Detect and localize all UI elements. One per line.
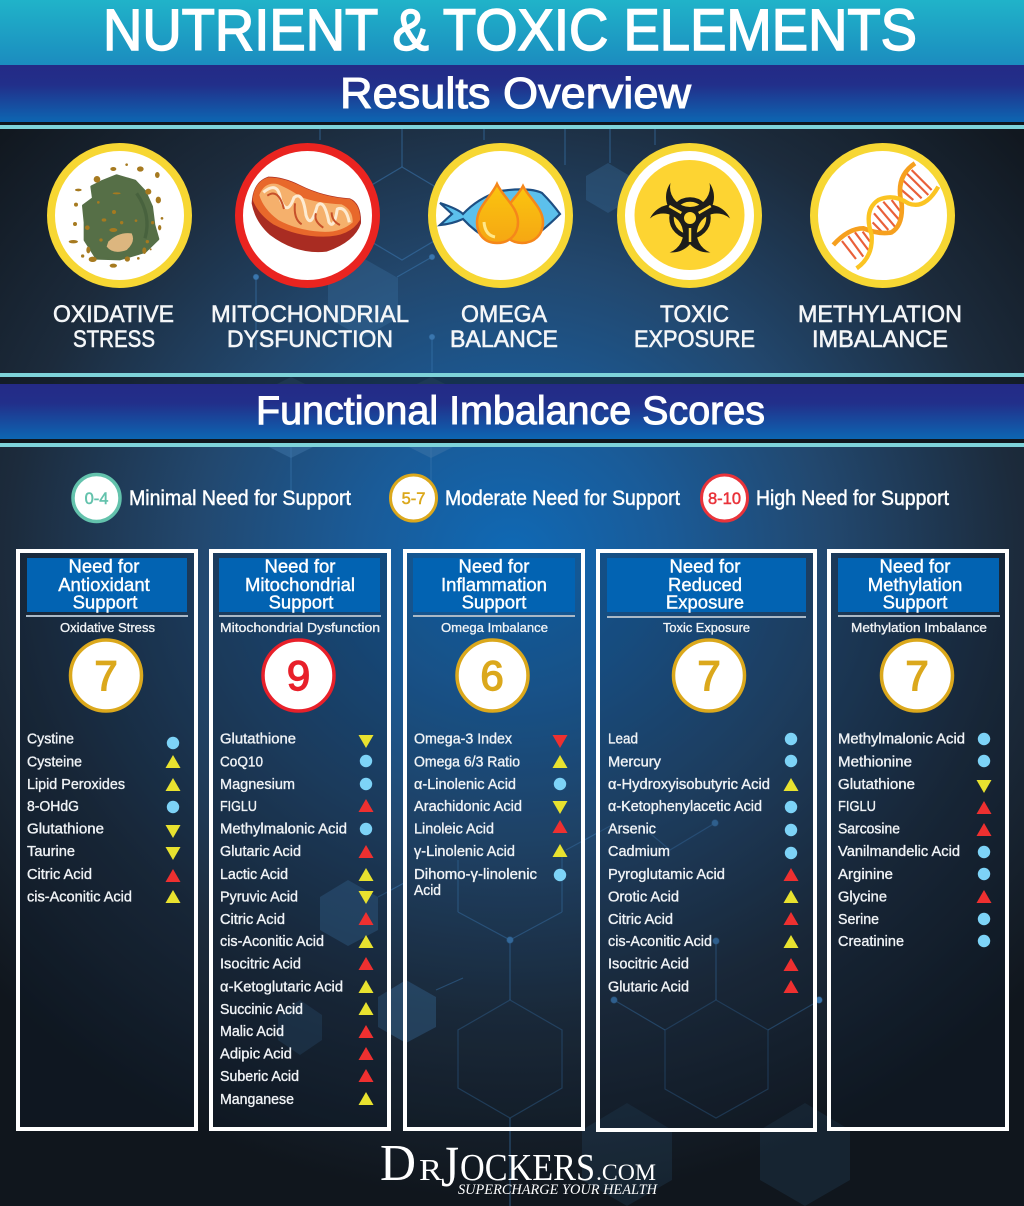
panel header: Need for [69, 556, 139, 576]
marker list: Sarcosine [838, 822, 900, 838]
marker list: cis-Aconitic Acid [27, 890, 132, 906]
panel header: Exposure [666, 592, 744, 612]
marker list: Glutathione [220, 732, 296, 748]
marker list: 8-OHdG [27, 799, 79, 815]
panel header: Need for [880, 556, 950, 576]
marker list: Dihomo-γ-linolenic [414, 867, 537, 883]
panel header: Oxidative Stress [60, 621, 155, 635]
icon labels: DYSFUNCTION [227, 326, 393, 353]
marker list: Citric Acid [220, 912, 285, 928]
icon labels: TOXIC [660, 301, 729, 328]
panel header [26, 556, 188, 635]
marker list: α-Hydroxyisobutyric Acid [608, 777, 770, 793]
marker list [608, 732, 798, 996]
panel header: Mitochondrial Dysfunction [220, 621, 380, 635]
icon: biohazard [621, 147, 758, 284]
logo: DrJockers.com [380, 1134, 658, 1199]
title band [0, 0, 1024, 65]
marker list: Arachidonic Acid [414, 799, 522, 815]
panel header: Mitochondrial [245, 574, 355, 595]
marker list: Arginine [838, 867, 893, 883]
marker list: Lipid Peroxides [27, 777, 125, 793]
section band: functional imbalance scores [0, 373, 1024, 447]
panel header: Reduced [668, 574, 742, 595]
marker list: Mercury [608, 754, 662, 770]
logo: DrJockers.com: .COM [596, 1160, 656, 1185]
icon labels: OMEGA [461, 301, 548, 328]
panel: methylation support [829, 551, 1007, 1129]
icon labels: MITOCHONDRIAL [211, 301, 409, 328]
marker list: Omega 6/3 Ratio [414, 754, 520, 770]
panel header: Inflammation [441, 574, 547, 595]
panel header: Support [462, 592, 526, 612]
score: 7 [70, 640, 142, 711]
marker list: Malic Acid [220, 1024, 284, 1040]
marker list: α-Ketophenylacetic Acid [608, 799, 762, 815]
score: 9: 9 [287, 652, 310, 699]
marker list: Lead [608, 732, 638, 748]
panel header [838, 556, 1000, 635]
panel: inflammation support [405, 551, 583, 1129]
panel header [413, 556, 575, 635]
score: 9 [263, 640, 334, 711]
icon: DNA helix [814, 147, 951, 284]
subtitle band: results overview [0, 65, 1024, 129]
panel header: Support [73, 592, 137, 612]
marker list: Adipic Acid [220, 1046, 292, 1062]
marker list: Methylmalonic Acid [838, 732, 965, 748]
hexagon network background [251, 129, 850, 1206]
panel: mitochondrial support [211, 551, 389, 1129]
marker list: Isocitric Acid [220, 956, 301, 972]
panel header: Need for [670, 556, 740, 576]
icon labels [53, 301, 962, 353]
marker list [27, 732, 180, 906]
logo: DrJockers.com: D [380, 1135, 416, 1192]
marker list: Methylmalonic Acid [220, 822, 347, 838]
logo: DrJockers.com: SUPERCHARGE YOUR HEALTH [458, 1182, 658, 1198]
icon labels: EXPOSURE [634, 326, 755, 353]
score: 7 [674, 640, 744, 711]
legend [73, 474, 949, 522]
marker list: Cadmium [608, 844, 670, 860]
icon: fish and oil drops [432, 147, 569, 284]
marker list: Glutathione [27, 822, 104, 838]
legend: 0-4 [85, 490, 108, 508]
marker list: FIGLU [838, 799, 876, 815]
panel header: Antioxidant [58, 574, 150, 595]
icon labels: STRESS [73, 326, 155, 353]
marker list: Manganese [220, 1092, 294, 1108]
legend: Minimal Need for Support [129, 487, 351, 510]
panel header: Need for [459, 556, 529, 576]
icon labels: METHYLATION [798, 301, 962, 328]
panel header [219, 556, 381, 635]
marker list: Acid [414, 883, 441, 899]
panel: antioxidant support [18, 551, 196, 1129]
marker list: Suberic Acid [220, 1069, 299, 1085]
marker list [414, 732, 568, 899]
heading: functional imbalance scores: Functional Imbalance Scores [256, 389, 765, 433]
marker list: Orotic Acid [608, 890, 679, 906]
icon labels: OXIDATIVE [53, 301, 174, 328]
logo: DrJockers.com: OCKERS [460, 1147, 595, 1189]
marker list: Taurine [27, 844, 75, 860]
marker list: Linoleic Acid [414, 822, 494, 838]
marker list: Methionine [838, 754, 912, 770]
marker list: cis-Aconitic Acid [608, 934, 712, 950]
score: 7: 7 [94, 652, 118, 699]
panel header: Omega Imbalance [441, 621, 548, 635]
legend: 5-7 [402, 490, 425, 508]
logo: DrJockers.com: R [419, 1152, 442, 1187]
legend: Moderate Need for Support [445, 487, 680, 510]
icon labels: IMBALANCE [812, 326, 948, 353]
marker list: α-Linolenic Acid [414, 777, 516, 793]
legend: High Need for Support [756, 487, 949, 510]
score: 7: 7 [697, 652, 721, 699]
icon: mitochondrion [239, 147, 376, 284]
marker list: Glutathione [838, 777, 915, 793]
legend: 8-10 [708, 490, 741, 508]
marker list: α-Ketoglutaric Acid [220, 980, 343, 996]
marker list: Glutaric Acid [220, 844, 301, 860]
panel header: Methylation [868, 574, 962, 595]
marker list: Serine [838, 912, 879, 928]
marker list: Arsenic [608, 822, 656, 838]
marker list: Cystine [27, 732, 74, 748]
marker list: Isocitric Acid [608, 956, 689, 972]
panel header: Need for [265, 556, 335, 576]
marker list: cis-Aconitic Acid [220, 934, 324, 950]
marker list [838, 732, 992, 950]
panel: reduced exposure [598, 551, 815, 1130]
marker list: Cysteine [27, 754, 82, 770]
marker list: Pyroglutamic Acid [608, 867, 725, 883]
score: 7 [882, 640, 952, 711]
marker list: Pyruvic Acid [220, 890, 298, 906]
panel header [607, 556, 806, 635]
marker list: Lactic Acid [220, 867, 288, 883]
heading: results overview: Results Overview [340, 69, 691, 118]
marker list: FIGLU [220, 799, 257, 815]
marker list: Succinic Acid [220, 1002, 303, 1018]
score: 7: 7 [905, 652, 929, 699]
icon labels: BALANCE [450, 326, 558, 353]
score: 6: 6 [480, 652, 504, 699]
marker list: γ-Linolenic Acid [414, 844, 515, 860]
marker list: Glutaric Acid [608, 980, 689, 996]
panel header: Support [269, 592, 333, 612]
marker list: Citric Acid [27, 867, 92, 883]
marker list: Glycine [838, 890, 887, 906]
panel header: Methylation Imbalance [851, 621, 987, 635]
marker list: Citric Acid [608, 912, 673, 928]
marker list: CoQ10 [220, 754, 263, 770]
logo: DrJockers.com: J [441, 1134, 459, 1199]
marker list: Vanilmandelic Acid [838, 844, 960, 860]
marker list: Omega-3 Index [414, 732, 513, 748]
panel header: Support [883, 592, 947, 612]
icon: oxidative stress [51, 147, 188, 284]
marker list: Magnesium [220, 777, 295, 793]
score: 6 [457, 640, 528, 711]
marker list: Creatinine [838, 934, 904, 950]
panel header: Toxic Exposure [663, 621, 750, 635]
marker list [220, 732, 374, 1108]
